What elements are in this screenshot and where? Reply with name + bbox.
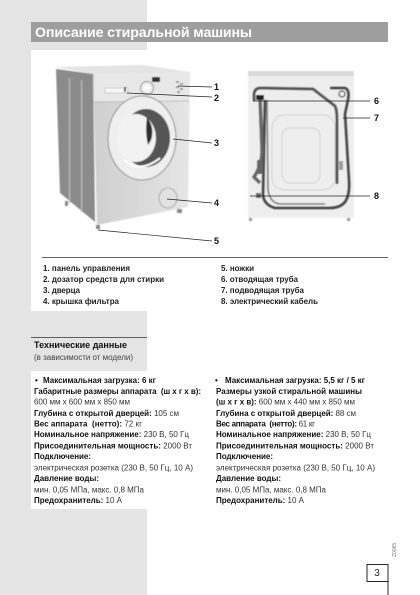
parts list: right column — [221, 264, 318, 306]
callout numbers 6-8 — [374, 96, 379, 201]
leader lines: front view — [98, 86, 212, 241]
page number box — [367, 564, 388, 595]
detergent drawer — [105, 87, 128, 93]
feet — [65, 201, 182, 229]
control buttons — [176, 81, 183, 93]
callout numbers 1-5: 4 — [214, 198, 219, 208]
specifications: left column: Глубина с открытой дверцей: 105 см — [34, 409, 179, 418]
specifications: right column: Максимальная загрузка: 5,5 кг / 5 кг — [225, 376, 366, 385]
parts list: right column: 8. электрический кабель — [221, 297, 318, 306]
control panel strip — [94, 72, 190, 102]
specifications: right column: мин. 0,05 МПа, макс. 0,8 МПа — [216, 486, 327, 494]
specifications: left column: Подключение: — [34, 452, 91, 461]
specifications: right column: Номинальное напряжение: 230 В, 50 Гц — [216, 430, 371, 439]
callout numbers 6-8: 8 — [374, 191, 379, 201]
inner hose — [267, 100, 325, 204]
left hose and pump — [254, 95, 264, 198]
valve — [339, 161, 343, 170]
specifications: right column: Подключение: — [216, 452, 273, 461]
specifications: right column: Предохранитель: 10 А — [216, 496, 305, 505]
specifications: right column — [215, 376, 375, 505]
inlet hose and cable loop — [263, 88, 349, 208]
rear feet — [249, 218, 350, 221]
specifications: left column: электрическая розетка (230 В, 50 Гц, 10 А) — [34, 464, 193, 472]
specifications: left column: Номинальное напряжение: 230 В, 50 Гц — [34, 430, 189, 439]
specifications: left column: Габаритные размеры аппарата (ш x г x в): — [34, 387, 201, 396]
drain hose — [254, 88, 337, 184]
specifications: left column: Давление воды: — [34, 474, 99, 483]
callout numbers 1-5: 2 — [214, 93, 219, 103]
title bar — [31, 22, 388, 42]
parts list: right column: 7. подводящая труба — [221, 286, 305, 295]
parts list: left column — [43, 264, 164, 306]
specifications: left column: Максимальная загрузка: 6 кг — [43, 376, 157, 385]
technical data heading: (в зависимости от модели) — [34, 353, 133, 362]
callout numbers 1-5: 3 — [214, 138, 219, 148]
filter cover — [159, 188, 177, 208]
specifications: left column — [34, 376, 201, 505]
machine side panel — [56, 69, 95, 222]
callout numbers 6-8: 6 — [374, 96, 379, 106]
rear top band — [248, 71, 354, 76]
door — [108, 96, 176, 180]
specifications: right column: Вес аппарата (нетто): 61 кг — [216, 420, 315, 428]
parts list: right column: 5. ножки — [221, 264, 254, 273]
specifications: right column: • — [215, 376, 218, 385]
title bar: Описание стиральной машины — [35, 25, 252, 41]
specifications: left column: мин. 0,05 МПа, макс. 0,8 МПа — [34, 486, 145, 494]
specifications: right column: (ш x г x в): 600 мм x 440 мм x 850 мм — [216, 398, 355, 406]
leader lines: rear view — [250, 101, 370, 196]
parts list: left column: 1. панель управления — [43, 264, 130, 273]
callout numbers 1-5: 5 — [214, 236, 219, 246]
technical data heading — [31, 338, 147, 362]
panel divider — [94, 101, 189, 102]
inlet connector — [339, 91, 345, 97]
illustration: washing machine front view — [55, 65, 190, 229]
specifications: left column: 600 мм x 600 мм x 850 мм — [34, 398, 130, 406]
callout numbers 1-5 — [214, 82, 219, 246]
divider above parts list — [42, 256, 388, 258]
specifications: left column: • — [35, 376, 38, 385]
specifications: left column: Присоединительная мощность: 2000 Вт — [34, 442, 192, 450]
parts list: right column: 6. отводящая труба — [221, 275, 299, 284]
specifications: left column: Вес аппарата (нетто): 72 кг — [34, 420, 142, 428]
callout numbers 1-5: 1 — [214, 82, 219, 92]
control knob — [140, 82, 154, 94]
specifications: right column: электрическая розетка (230 В, 50 Гц, 10 А) — [216, 464, 375, 472]
illustration: washing machine rear view — [248, 71, 354, 221]
specifications: right column: Размеры узкой стиральной машины — [216, 387, 362, 396]
display — [152, 77, 160, 82]
parts list: left column: 3. дверца — [43, 286, 81, 295]
document code: Z0065 — [392, 543, 398, 557]
specifications: right column: Глубина с открытой дверцей: 88 см — [216, 409, 356, 418]
technical data heading: Технические данные — [34, 340, 127, 350]
callout numbers 6-8: 7 — [374, 113, 379, 123]
rear panel recesses — [272, 115, 335, 190]
page number box: 3 — [374, 568, 380, 579]
rear body — [248, 71, 354, 218]
machine front panel — [93, 72, 190, 225]
parts list: left column: 4. крышка фильтра — [43, 297, 120, 306]
machine top — [55, 65, 190, 74]
parts list: left column: 2. дозатор средств для стирки — [43, 275, 164, 284]
specifications: right column: Присоединительная мощность: 2000 Вт — [216, 442, 374, 450]
specifications: right column: Давление воды: — [216, 474, 281, 483]
specifications: left column: Предохранитель: 10 А — [34, 496, 123, 505]
